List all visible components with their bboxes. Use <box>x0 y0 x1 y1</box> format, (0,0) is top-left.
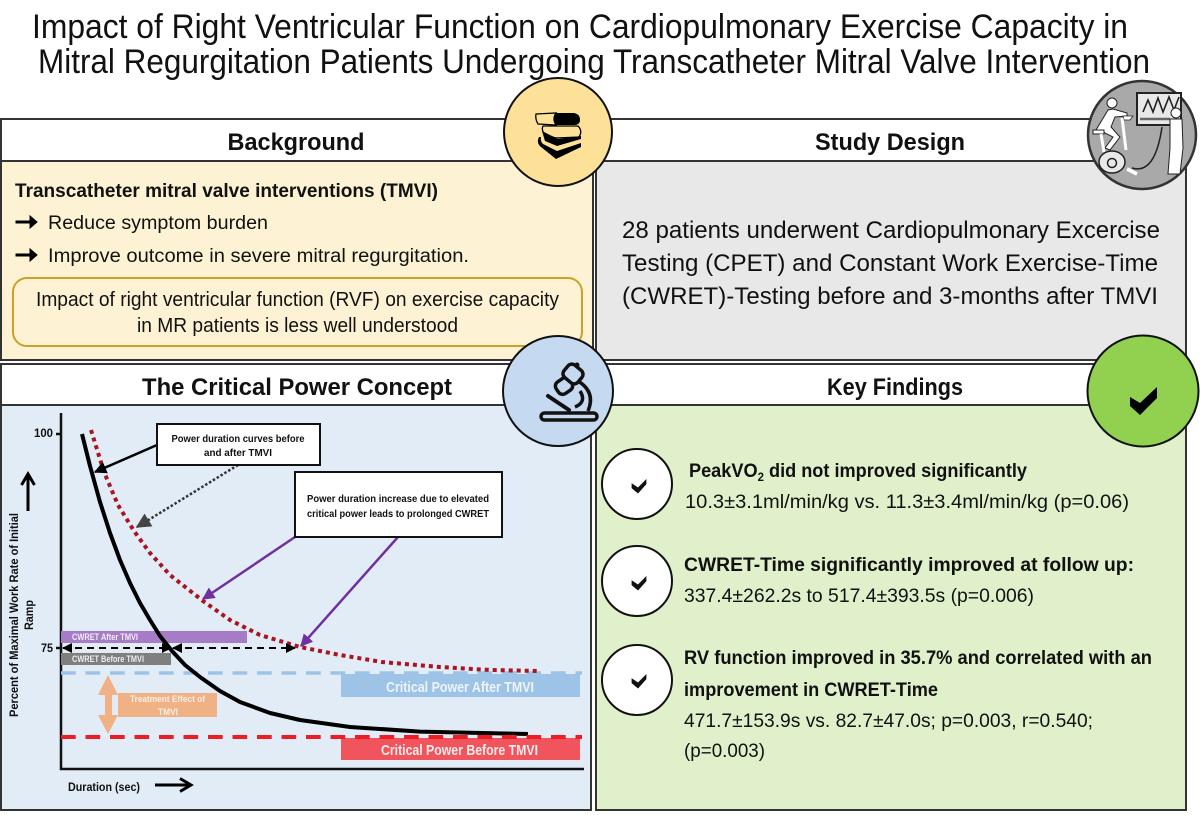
tick label 100: 100 <box>34 428 53 440</box>
y axis label: Ramp <box>24 600 36 630</box>
callout: power duration curves: Power duration curves before <box>172 433 305 445</box>
label: treatment effect <box>118 693 217 718</box>
chart: power duration curves <box>9 413 584 794</box>
finding 2 values: 337.4±262.2s to 517.4±393.5s (p=0.006) <box>684 586 1034 607</box>
icon: check circle 1 <box>602 449 672 519</box>
arrow: curves callout dotted <box>137 465 238 527</box>
finding 3 heading <box>684 648 1152 701</box>
finding 1 heading: PeakVO <box>689 461 761 482</box>
finding 3 <box>602 645 1152 762</box>
finding 1 values: 10.3±3.1ml/min/kg vs. 11.3±3.4ml/min/kg (p=0.06) <box>685 492 1129 513</box>
callout: power duration curves <box>157 424 320 465</box>
finding 3 values: 471.7±153.9s vs. 82.7±47.0s; p=0.003, r=0.540; <box>684 711 1093 732</box>
icon: microscope <box>503 336 613 446</box>
finding 3 heading: RV function improved in 35.7% and correlated with an <box>684 648 1152 669</box>
arrow: purple to red curve upper <box>203 537 295 599</box>
finding 3 heading: improvement in CWRET-Time <box>684 680 938 701</box>
background intro text: Transcatheter mitral valve interventions (TMVI) <box>15 181 438 202</box>
title: Impact of Right Ventricular Function on Cardiopulmonary Exercise Capacity in <box>32 8 1128 46</box>
tick label 75 <box>41 643 61 655</box>
label: critical power after <box>341 674 580 697</box>
label: critical power before <box>341 738 580 760</box>
bullet text 2: Improve outcome in severe mitral regurgitation. <box>48 246 469 267</box>
bullet text 1: Reduce symptom burden <box>48 213 268 234</box>
finding 2 heading: CWRET-Time significantly improved at follow up: <box>684 555 1134 576</box>
bar: CWRET after TMVI: CWRET After TMVI <box>72 632 138 643</box>
line: critical power before <box>61 735 582 739</box>
callout: RVF impact: Impact of right ventricular function (RVF) on exercise capacity <box>36 289 559 311</box>
dashed arrow: CWRET after <box>173 647 295 649</box>
bar: CWRET after TMVI <box>61 631 247 643</box>
finding 3 values <box>684 711 1093 762</box>
finding 1 heading: 2 <box>758 470 764 484</box>
dashed arrow: CWRET before <box>63 647 171 649</box>
tick label 75: 75 <box>41 643 54 655</box>
icon: check circle 2 <box>602 546 672 616</box>
finding 1 heading: did not improved significantly <box>764 461 1027 482</box>
study description: (CWRET)-Testing before and 3-months after TMVI <box>622 283 1158 310</box>
callout: power duration increase: Power duration increase due to elevated <box>307 493 489 505</box>
icon: cycling exercise test <box>1088 81 1196 189</box>
study description: Testing (CPET) and Constant Work Exercise-Time <box>622 250 1158 277</box>
callout: power duration increase: critical power leads to prolonged CWRET <box>307 508 490 520</box>
arrow: curves callout solid <box>95 445 157 472</box>
label: treatment effect: Treatment Effect of <box>130 694 206 705</box>
arrow bullet 2 <box>16 249 37 261</box>
arrow: treatment effect <box>98 675 118 734</box>
callout: RVF impact: in MR patients is less well understood <box>137 315 458 337</box>
heading: study design: Study Design <box>815 129 965 156</box>
icon: books <box>504 78 612 186</box>
arrow: purple to red curve lower <box>301 537 398 646</box>
finding 1 <box>602 449 1129 519</box>
finding 2 <box>602 546 1134 616</box>
callout: power duration curves: and after TMVI <box>204 447 272 459</box>
callout: power duration increase <box>295 472 502 537</box>
title <box>32 8 1150 81</box>
x axis label: Duration (sec) <box>68 780 140 794</box>
study description <box>622 217 1160 310</box>
curve: before TMVI <box>82 434 528 734</box>
label: treatment effect: TMVI <box>158 707 178 718</box>
bar: CWRET before TMVI: CWRET Before TMVI <box>72 654 144 665</box>
study description: 28 patients underwent Cardiopulmonary Excercise <box>622 217 1160 244</box>
icon: check circle 3 <box>602 645 672 715</box>
y axis label: Percent of Maximal Work Rate of Initial <box>9 513 21 717</box>
callout: RVF impact <box>13 278 582 346</box>
icon: key findings check <box>1088 336 1198 446</box>
line: critical power after <box>61 671 582 675</box>
panel: background <box>1 119 593 360</box>
arrow bullet 1 <box>16 216 37 228</box>
heading: key findings: Key Findings <box>827 374 963 401</box>
curve: after TMVI <box>91 430 538 671</box>
arrow: x axis direction <box>155 778 191 792</box>
arrow: y axis direction <box>22 474 34 511</box>
heading: critical power: The Critical Power Concept <box>142 374 452 401</box>
finding 3 values: (p=0.003) <box>684 741 765 762</box>
heading: background: Background <box>228 129 364 156</box>
label: critical power after: Critical Power After TMVI <box>386 679 534 696</box>
panel: critical power concept <box>1 364 593 810</box>
y axis label <box>9 513 36 717</box>
label: critical power before: Critical Power Before TMVI <box>381 742 538 759</box>
chart axes <box>61 413 584 769</box>
panel: key findings <box>596 364 1186 810</box>
panel: study design <box>596 119 1186 360</box>
